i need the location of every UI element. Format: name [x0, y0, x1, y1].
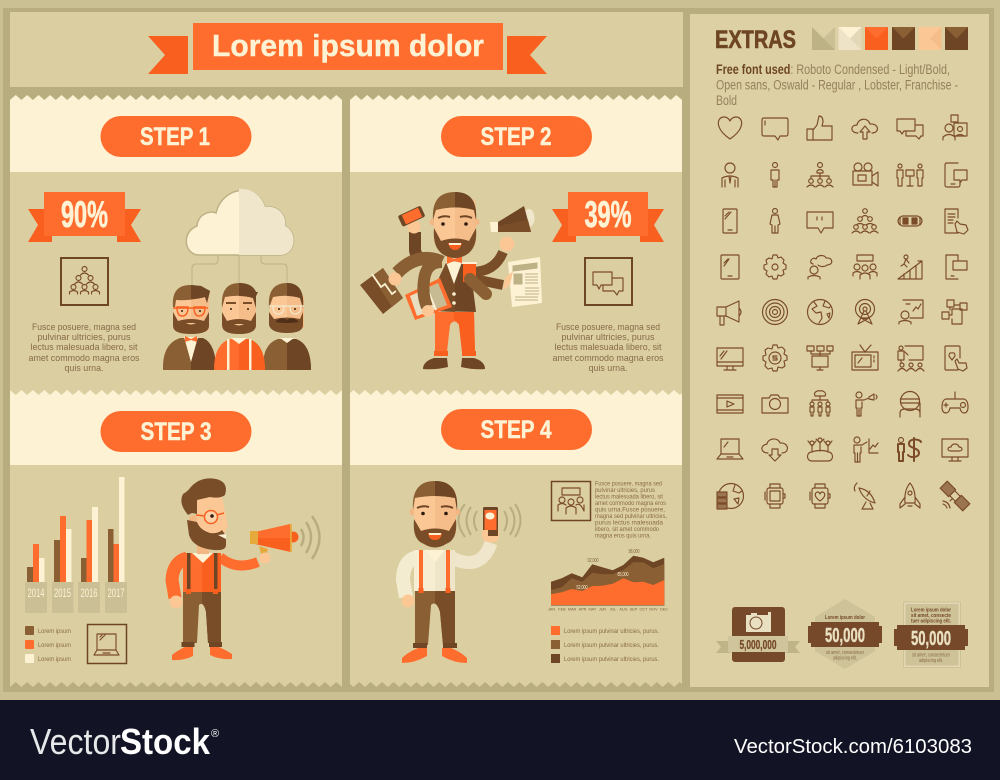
legend	[551, 626, 659, 663]
icon: meeting group	[552, 482, 590, 520]
ribbon: 39%: 39%	[584, 194, 632, 235]
ribbon: 90%	[28, 192, 141, 242]
step 3 pill	[100, 411, 252, 452]
icon: chat bubbles	[585, 258, 632, 305]
icon: globe server	[717, 484, 744, 509]
legs	[402, 590, 467, 663]
watermark logo: Stock	[120, 721, 211, 762]
badge: camera 5,000,000: 5,000,000	[740, 637, 776, 652]
badge: hexagon 50,000: sit amet, consectetuer	[826, 650, 864, 656]
icon: television	[852, 345, 878, 370]
step 1 pill: STEP 1	[140, 123, 210, 151]
right arm with newspaper	[474, 271, 513, 290]
icon: video player	[717, 395, 743, 413]
bar chart: 2015	[54, 586, 71, 600]
step 4 pill	[441, 409, 592, 450]
legend: Lorem ipsum pulvinar ultricies, purus.	[564, 656, 659, 663]
icon: chat	[897, 119, 923, 139]
icon: consultant	[943, 115, 967, 140]
paper	[508, 257, 542, 307]
legend	[25, 626, 71, 663]
badge: rectangle 50,000: adipiscing elit.	[919, 658, 943, 664]
legend: Lorem ipsum	[38, 629, 71, 635]
area chart: JAN	[548, 608, 555, 612]
colour swatches	[812, 27, 968, 50]
text block: pulvinar ultricies, purus	[595, 487, 655, 494]
icon: radio tower	[856, 300, 874, 324]
text block: magna eros quis urna.	[595, 532, 651, 540]
badge: rectangle 50,000: tuer adipiscing elit.	[911, 618, 951, 624]
icon: presenter with chart	[854, 437, 878, 462]
icon: rocket	[900, 483, 920, 508]
icon: man	[771, 162, 779, 187]
footer bar	[0, 700, 1000, 780]
cloud with connectors	[186, 189, 294, 290]
text block	[28, 322, 140, 373]
icon: camera	[762, 395, 788, 413]
text block: magna sed pulvinar ultricies,	[595, 513, 667, 520]
icon: laptop	[717, 439, 743, 459]
icon: businessman	[722, 163, 738, 187]
panel: step 3	[10, 390, 342, 687]
icon: cloud team	[810, 391, 830, 416]
watermark logo: ®	[211, 728, 219, 740]
upper left arm holding phone	[398, 205, 440, 262]
step 3 pill: STEP 3	[140, 418, 212, 446]
area chart: DEC	[660, 608, 668, 612]
icon: phone sms	[946, 255, 967, 279]
legs	[172, 590, 232, 660]
ribbon: 39%	[552, 192, 664, 242]
icon: presentation	[897, 164, 923, 186]
left arm holding briefcase	[388, 258, 442, 286]
text block: Fusce posuere, magna sed	[595, 480, 662, 488]
arms and shirt	[170, 553, 258, 608]
area chart: JUN	[599, 608, 606, 612]
icon: phone with hand	[945, 209, 968, 234]
free font note	[716, 62, 958, 108]
area chart: 52,000	[576, 585, 588, 591]
text block: Fusce posuere, magna sed	[32, 322, 136, 332]
text block: quis urna.Fusce posuere,	[595, 506, 665, 514]
free font note: Bold	[716, 93, 737, 108]
icon: chart presenter	[899, 300, 923, 324]
step 2 pill: STEP 2	[480, 123, 552, 151]
text block: lectus malesuada libero, sit	[595, 494, 663, 500]
badge: camera 5,000,000	[716, 607, 800, 662]
ribbon: 90%: 90%	[61, 194, 108, 235]
area chart: SEP	[630, 608, 638, 612]
panel: step 4	[350, 390, 682, 687]
area chart: 92,000	[588, 558, 599, 564]
free font note: Free font used: Roboto Condensed - Light/Bold,	[716, 62, 950, 77]
watermark url: VectorStock.com/6103083	[734, 736, 972, 758]
icon: cloud people	[808, 438, 832, 461]
icon: people pyramid	[61, 258, 108, 305]
text block: quis urna.	[64, 363, 104, 373]
text block: libero, sit amet commodo	[595, 526, 659, 533]
person: orange shirt with suspenders	[214, 283, 265, 370]
icon: laptop	[88, 624, 126, 664]
icon: gear with dollar	[763, 345, 787, 371]
icon: satellite dish	[854, 483, 875, 509]
person: brown jacket with orange glasses	[163, 285, 216, 370]
extras heading: EXTRAS	[715, 26, 796, 54]
watermark logo: Vector	[30, 721, 121, 762]
legend: Lorem ipsum pulvinar ultricies, purus.	[564, 642, 659, 649]
person: brown suit with white glasses	[263, 283, 311, 370]
text block	[552, 322, 664, 373]
signal waves	[458, 504, 520, 537]
area chart: NOV	[649, 608, 658, 612]
upper right arm with megaphone	[472, 206, 534, 272]
head	[410, 481, 460, 548]
area chart: FEB	[558, 608, 566, 612]
icon: tablet	[721, 255, 739, 279]
legend: Lorem ipsum	[38, 657, 71, 663]
icon: speech bubble	[762, 118, 788, 140]
icon: phone heart	[945, 346, 967, 371]
text block: Fusce posuere, magna sed	[556, 322, 660, 332]
icon: woman	[770, 208, 780, 233]
bar chart: 2014	[28, 586, 45, 600]
legend: Lorem ipsum	[38, 643, 71, 649]
icon: monitor cloud	[942, 439, 968, 461]
icon: monitor	[717, 348, 743, 370]
text block	[595, 480, 667, 540]
title panel	[10, 12, 683, 87]
icon: people pyramid	[852, 209, 878, 233]
icon: connected devices	[942, 300, 967, 324]
head	[430, 192, 480, 258]
badge: hexagon 50,000: 50,000	[825, 625, 865, 647]
panel: step 1	[10, 95, 342, 390]
badge: hexagon 50,000	[808, 599, 882, 669]
text block: lectus malesuada libero, sit	[554, 342, 662, 352]
text block: amet commodo magna eros	[552, 353, 664, 363]
area chart: 85,000	[618, 572, 629, 578]
icon: smartwatch heart	[810, 484, 830, 508]
badge: rectangle 50,000: sit amet, consecte	[911, 613, 951, 619]
area chart: APR	[579, 608, 587, 612]
head in profile	[181, 478, 228, 554]
icon: vr glasses	[898, 216, 922, 226]
icon grid	[717, 115, 970, 512]
icon: smartwatch	[765, 484, 785, 508]
icon: man with dollar	[898, 438, 921, 461]
text block: amet commodo magna eros	[595, 500, 666, 507]
shirt and arms	[402, 543, 491, 608]
icon: megaphone	[717, 301, 741, 325]
title ribbon	[148, 23, 547, 74]
icon: cloud download	[762, 439, 787, 461]
icon: man with megaphone	[856, 392, 877, 416]
icon: person thinking	[808, 256, 832, 279]
pants	[434, 312, 476, 356]
icon: gear	[764, 255, 786, 279]
character: multitasking man	[360, 192, 542, 369]
badge: rectangle 50,000: 50,000	[911, 628, 951, 650]
icon: smartphone	[723, 209, 737, 233]
briefcase	[360, 268, 403, 314]
character: man with megaphone	[170, 478, 320, 660]
step 1 pill	[100, 116, 252, 157]
sound waves	[301, 516, 320, 559]
panel: step 2	[350, 95, 682, 390]
text block: quis urna.	[588, 363, 628, 373]
icon: video camera	[853, 163, 878, 186]
icon: seminar	[898, 346, 924, 371]
badge: hexagon 50,000: Lorem ipsum dolor	[825, 615, 865, 621]
text block: amet commodo magna eros	[28, 353, 140, 363]
text block: pulvinar ultricies, purus	[562, 332, 655, 342]
area chart: AUG	[619, 608, 628, 612]
watermark logo	[30, 721, 219, 762]
icon: satellite	[939, 481, 970, 512]
badge: rectangle 50,000: sit amet, consectetuer	[912, 652, 950, 658]
text block: lectus malesuada libero, sit	[30, 342, 138, 352]
icon: group meeting	[853, 255, 877, 279]
icon: hierarchy	[807, 162, 833, 187]
phone in hand	[482, 507, 499, 542]
bar chart: 2017	[108, 586, 125, 600]
area chart: OCT	[639, 608, 648, 612]
text block: pulvinar ultricies, purus	[38, 332, 131, 342]
step 2 pill	[441, 116, 592, 157]
icon: quote bubble	[807, 212, 833, 233]
text block: purus lectus malesuada	[595, 520, 663, 526]
character: man with phone	[402, 481, 520, 663]
area chart: 98,000	[628, 549, 640, 555]
coffee cup	[462, 262, 486, 294]
area chart: MAY	[589, 608, 597, 612]
step 4 pill: STEP 4	[480, 416, 552, 444]
jacket	[433, 256, 476, 312]
lower arm holding tablet	[422, 262, 442, 317]
badge: hexagon 50,000: adipiscing elit.	[833, 656, 857, 662]
badge: rectangle 50,000	[894, 602, 968, 668]
megaphone	[250, 524, 298, 564]
area chart: JUL	[610, 608, 616, 612]
panel: extras	[690, 14, 989, 687]
area chart: MAR	[568, 608, 576, 612]
shoes	[423, 358, 485, 369]
icon: heart	[718, 117, 742, 139]
bar chart: 2016	[80, 586, 98, 600]
bar chart	[25, 477, 127, 613]
area chart	[548, 549, 668, 612]
icon: globe	[808, 300, 832, 324]
icon: phone with bubble	[945, 163, 967, 187]
icon: game controller	[942, 392, 968, 413]
legend: Lorem ipsum pulvinar ultricies, purus.	[564, 628, 659, 635]
icon: thumbs up	[807, 116, 832, 140]
icon: career growth	[898, 255, 922, 279]
icon: target	[762, 300, 788, 324]
icon: network screens	[807, 346, 833, 370]
badge: rectangle 50,000: Lorem ipsum dolor	[911, 608, 951, 614]
icon: cloud upload	[852, 119, 877, 139]
title ribbon: Lorem ipsum dolor	[212, 28, 484, 63]
tablet	[405, 278, 452, 320]
icon: vr head	[900, 392, 920, 417]
